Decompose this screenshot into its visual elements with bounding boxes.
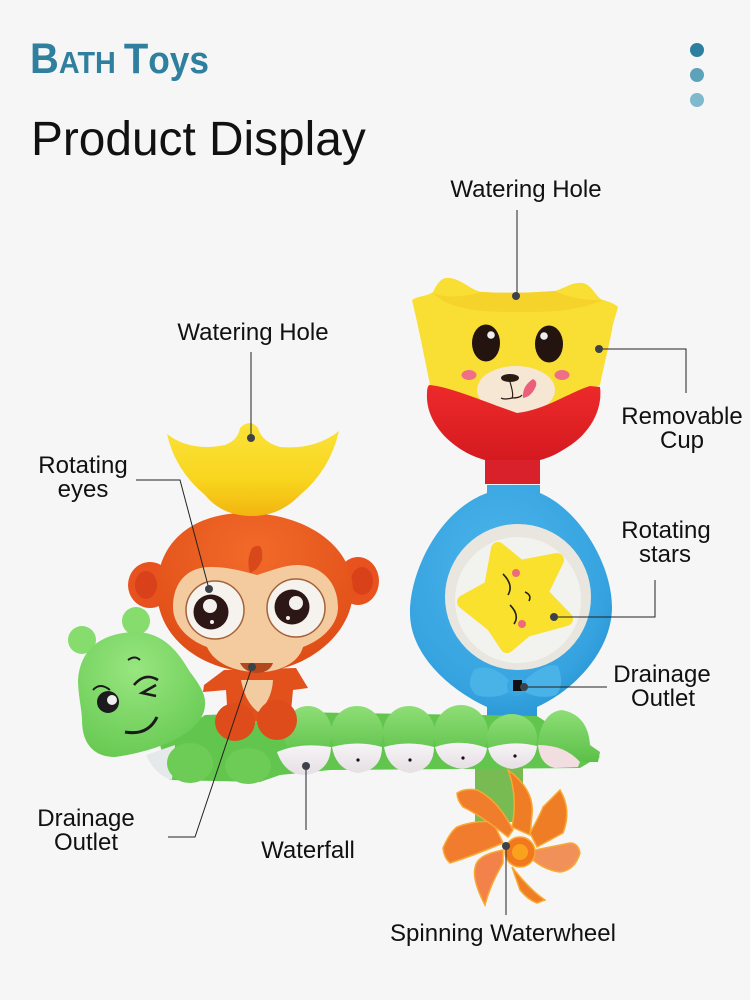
labels: Removable	[621, 403, 743, 430]
title: Product Display: Product Display	[31, 113, 366, 166]
star	[464, 549, 566, 646]
labels: Spinning Waterwheel	[390, 920, 616, 947]
labels	[37, 176, 743, 947]
labels: stars	[639, 541, 691, 568]
decorative dots	[690, 43, 704, 107]
labels: Outlet	[54, 829, 118, 856]
labels: Watering Hole	[450, 176, 602, 203]
callout markers	[205, 292, 603, 850]
callout lines	[136, 210, 686, 915]
labels: Rotating	[621, 517, 711, 544]
toy: waterwheel	[443, 770, 580, 905]
toy: green stem	[475, 762, 523, 822]
labels: Drainage	[613, 661, 711, 688]
labels: eyes	[58, 476, 108, 503]
toy: blue body with star wheel	[410, 485, 612, 725]
toy: green caterpillar	[146, 705, 600, 784]
toy: monkey	[128, 513, 379, 741]
brand heading: Bath Toys: BATH Toys	[30, 35, 209, 83]
bow	[470, 668, 509, 697]
labels: Drainage	[37, 805, 135, 832]
labels: Cup	[660, 427, 704, 454]
toy: caterpillar head	[68, 607, 205, 757]
labels: Waterfall	[261, 837, 355, 864]
labels: Outlet	[631, 685, 695, 712]
labels: Watering Hole	[177, 319, 329, 346]
labels: Rotating	[38, 452, 128, 479]
toy: yellow crown cup	[167, 423, 339, 516]
toy: bear cup	[412, 278, 618, 484]
